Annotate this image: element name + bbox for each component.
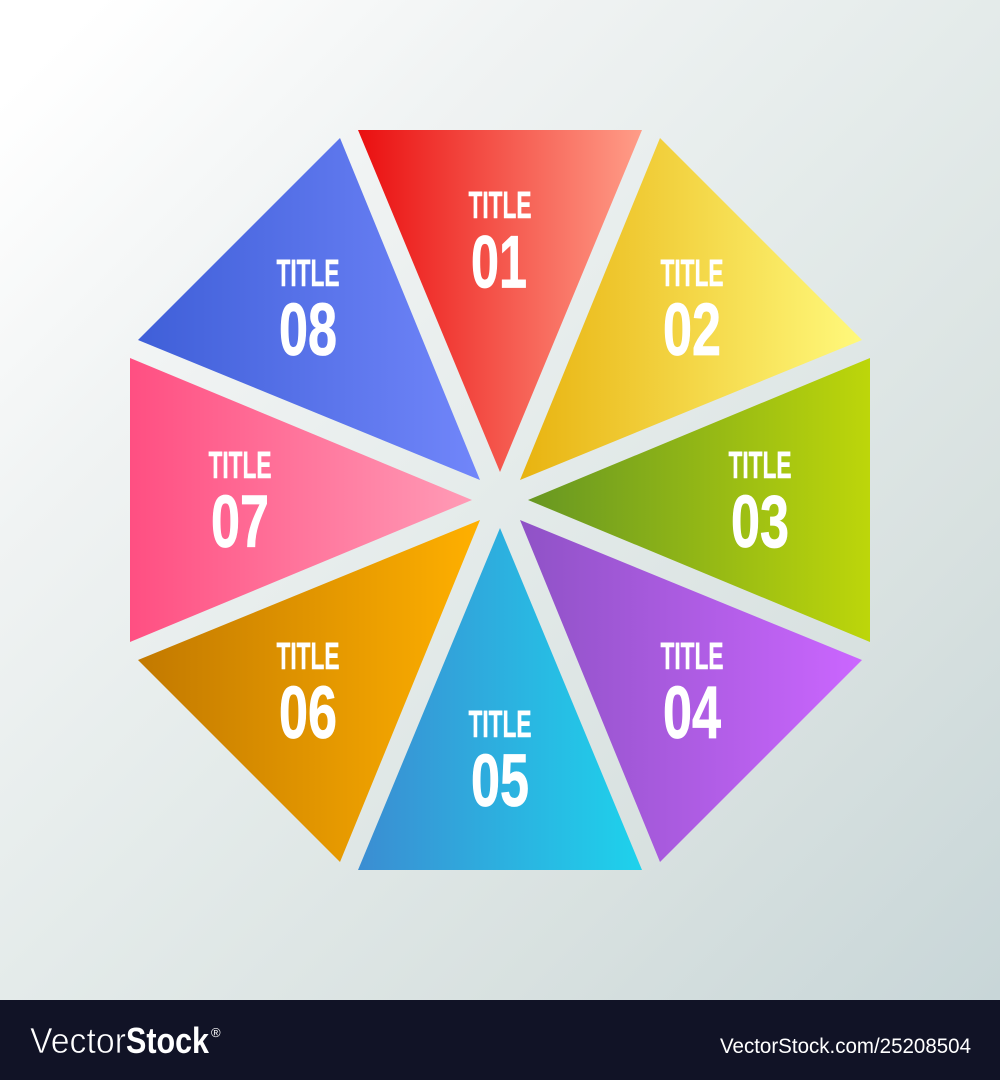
label 04: TITLE <box>660 636 724 678</box>
label 08: 08 <box>279 288 337 371</box>
segment 06 <box>138 520 480 862</box>
footer logo: ® <box>211 1025 221 1040</box>
segment 08 <box>138 138 480 480</box>
label 08 <box>276 253 340 371</box>
label 05 <box>468 704 532 822</box>
label 04 <box>660 636 724 754</box>
segment 05 <box>358 528 642 870</box>
segment 02 <box>520 138 862 480</box>
label 07: TITLE <box>208 445 272 487</box>
segment 07 <box>130 358 472 642</box>
label 06: 06 <box>279 671 337 754</box>
footer logo: Stock <box>126 1020 210 1061</box>
label 02 <box>660 253 724 371</box>
label 07: 07 <box>211 480 269 563</box>
label 04: 04 <box>663 671 721 754</box>
label 01 <box>468 185 532 304</box>
footer url: VectorStock.com/25208504 <box>720 1035 971 1058</box>
label 07 <box>208 445 272 563</box>
label 01: TITLE <box>468 185 532 227</box>
label 01: 01 <box>471 220 527 304</box>
label 03: TITLE <box>728 445 792 487</box>
label 05: TITLE <box>468 704 532 746</box>
footer bar <box>0 1000 1000 1080</box>
label 05: 05 <box>471 739 529 822</box>
label 06: TITLE <box>276 636 340 678</box>
footer logo: Vector <box>30 1020 126 1061</box>
segment 04 <box>520 520 862 862</box>
label 06 <box>276 636 340 754</box>
label 03 <box>728 445 792 563</box>
label 08: TITLE <box>276 253 340 295</box>
label 03: 03 <box>731 480 789 563</box>
label 02: 02 <box>663 288 721 371</box>
segment 03 <box>528 358 870 642</box>
segment 01 <box>358 130 642 472</box>
label 02: TITLE <box>660 253 724 295</box>
footer logo <box>30 1020 221 1061</box>
